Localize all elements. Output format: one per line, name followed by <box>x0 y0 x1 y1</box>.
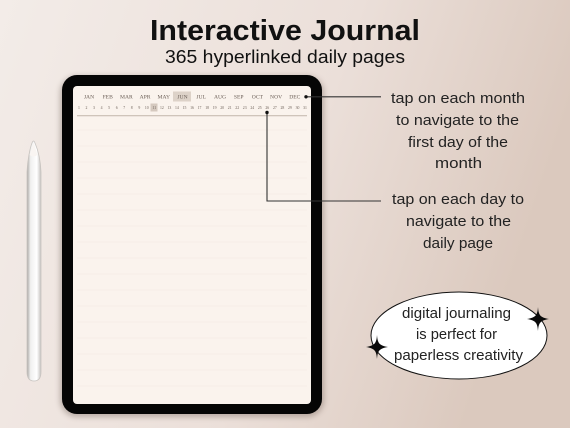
day tabs: 31 <box>303 106 307 110</box>
tablet screen <box>73 86 311 404</box>
day tabs: 23 <box>243 106 247 110</box>
day tabs: 1 <box>78 106 80 110</box>
callout: day instructions: navigate to the <box>406 214 511 230</box>
month tabs: MAR <box>120 94 133 100</box>
callout: month instructions <box>391 91 525 172</box>
month tabs: JUN <box>177 94 188 100</box>
day tabs: 6 <box>116 106 118 110</box>
day tabs: 14 <box>175 106 179 110</box>
month tabs: NOV <box>270 94 282 100</box>
day tabs: 25 <box>258 106 262 110</box>
callout: day instructions <box>392 192 524 252</box>
day tabs: 28 <box>281 106 284 110</box>
day tabs: 15 <box>183 106 186 110</box>
icon: stylus pencil <box>27 141 41 381</box>
header rule <box>77 115 307 116</box>
day tabs: 20 <box>220 106 224 110</box>
callout: day instructions: tap on each day to <box>392 192 524 208</box>
month tabs: FEB <box>103 94 113 100</box>
day highlight <box>150 104 158 112</box>
callout: month instructions: month <box>435 156 482 172</box>
month tabs: AUG <box>214 94 226 100</box>
day tabs: 17 <box>198 106 202 110</box>
callout: month instructions: first day of the <box>408 135 508 151</box>
arrow: day callout <box>265 111 381 201</box>
month tabs: APR <box>140 94 151 100</box>
day tabs: 21 <box>228 106 232 110</box>
month tabs <box>84 94 301 100</box>
month tabs: SEP <box>234 94 244 100</box>
day tabs: 2 <box>86 106 88 110</box>
day tabs: 18 <box>205 106 209 110</box>
day tabs: 9 <box>138 106 140 110</box>
month highlight <box>173 92 191 102</box>
tablet body <box>62 75 322 414</box>
month tabs: OCT <box>252 94 264 100</box>
day tabs <box>78 106 307 110</box>
day tabs: 10 <box>145 106 149 110</box>
month tabs: JAN <box>84 94 94 100</box>
device shadow <box>60 76 324 417</box>
title: Interactive Journal <box>150 15 420 47</box>
day tabs: 3 <box>93 106 95 110</box>
arrow: month callout <box>304 95 381 99</box>
day tabs: 24 <box>250 106 254 110</box>
day tabs: 27 <box>273 106 277 110</box>
ellipse callout <box>366 292 549 379</box>
day tabs: 7 <box>123 106 125 110</box>
day tabs: 29 <box>288 106 292 110</box>
month tabs: DEC <box>289 94 301 100</box>
day tabs: 11 <box>152 106 156 110</box>
icon: sparkle right <box>527 307 549 331</box>
day tabs: 8 <box>131 106 133 110</box>
day tabs: 4 <box>101 106 103 110</box>
day tabs: 12 <box>160 106 164 110</box>
day tabs: 19 <box>213 106 217 110</box>
tablet <box>62 75 322 414</box>
ellipse callout: digital journaling <box>402 306 511 322</box>
icon: sparkle left <box>366 335 388 359</box>
callout: day instructions: daily page <box>423 236 493 252</box>
callout: month instructions: tap on each month <box>391 91 525 107</box>
day tabs: 22 <box>235 106 239 110</box>
day tabs: 5 <box>108 106 110 110</box>
ellipse callout: paperless creativity <box>394 348 524 364</box>
day tabs: 26 <box>265 106 269 110</box>
subtitle: 365 hyperlinked daily pages <box>165 46 405 67</box>
day tabs: 13 <box>168 106 171 110</box>
day tabs: 30 <box>296 106 300 110</box>
day tabs: 16 <box>190 106 194 110</box>
month tabs: MAY <box>158 94 170 100</box>
ruled lines <box>77 130 307 386</box>
month tabs: JUL <box>196 94 207 100</box>
callout: month instructions: to navigate to the <box>396 113 519 129</box>
ellipse callout: is perfect for <box>416 327 497 343</box>
